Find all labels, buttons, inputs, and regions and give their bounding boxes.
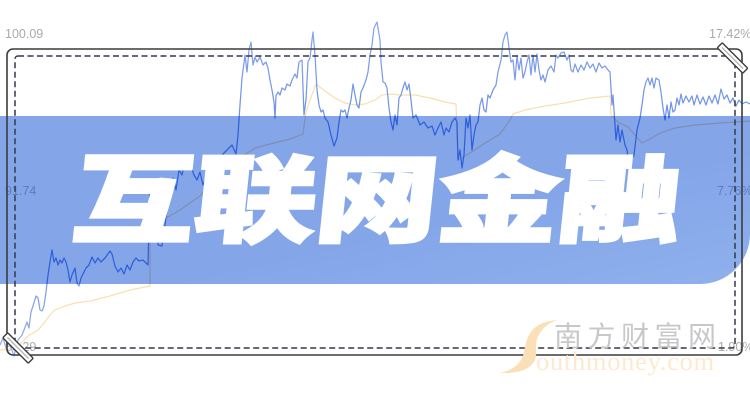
watermark latin name: outhmoney.com: [536, 346, 715, 376]
axis labels: 100.09: [5, 27, 43, 41]
watermark swoosh: [500, 320, 557, 373]
watermark chinese name: 南方财富网: [554, 315, 722, 355]
line chart: average line: [0, 84, 750, 350]
watermark logo: [500, 315, 722, 376]
blue band: [0, 116, 750, 284]
dashed inner frame: [15, 56, 735, 348]
outer frame: [7, 49, 742, 355]
title: 互联网金融: [67, 125, 689, 262]
axis labels: 91.74: [5, 184, 36, 198]
handle: top right: [717, 43, 748, 73]
axis labels: 83.29: [5, 340, 36, 354]
handle: bottom left: [3, 333, 33, 363]
